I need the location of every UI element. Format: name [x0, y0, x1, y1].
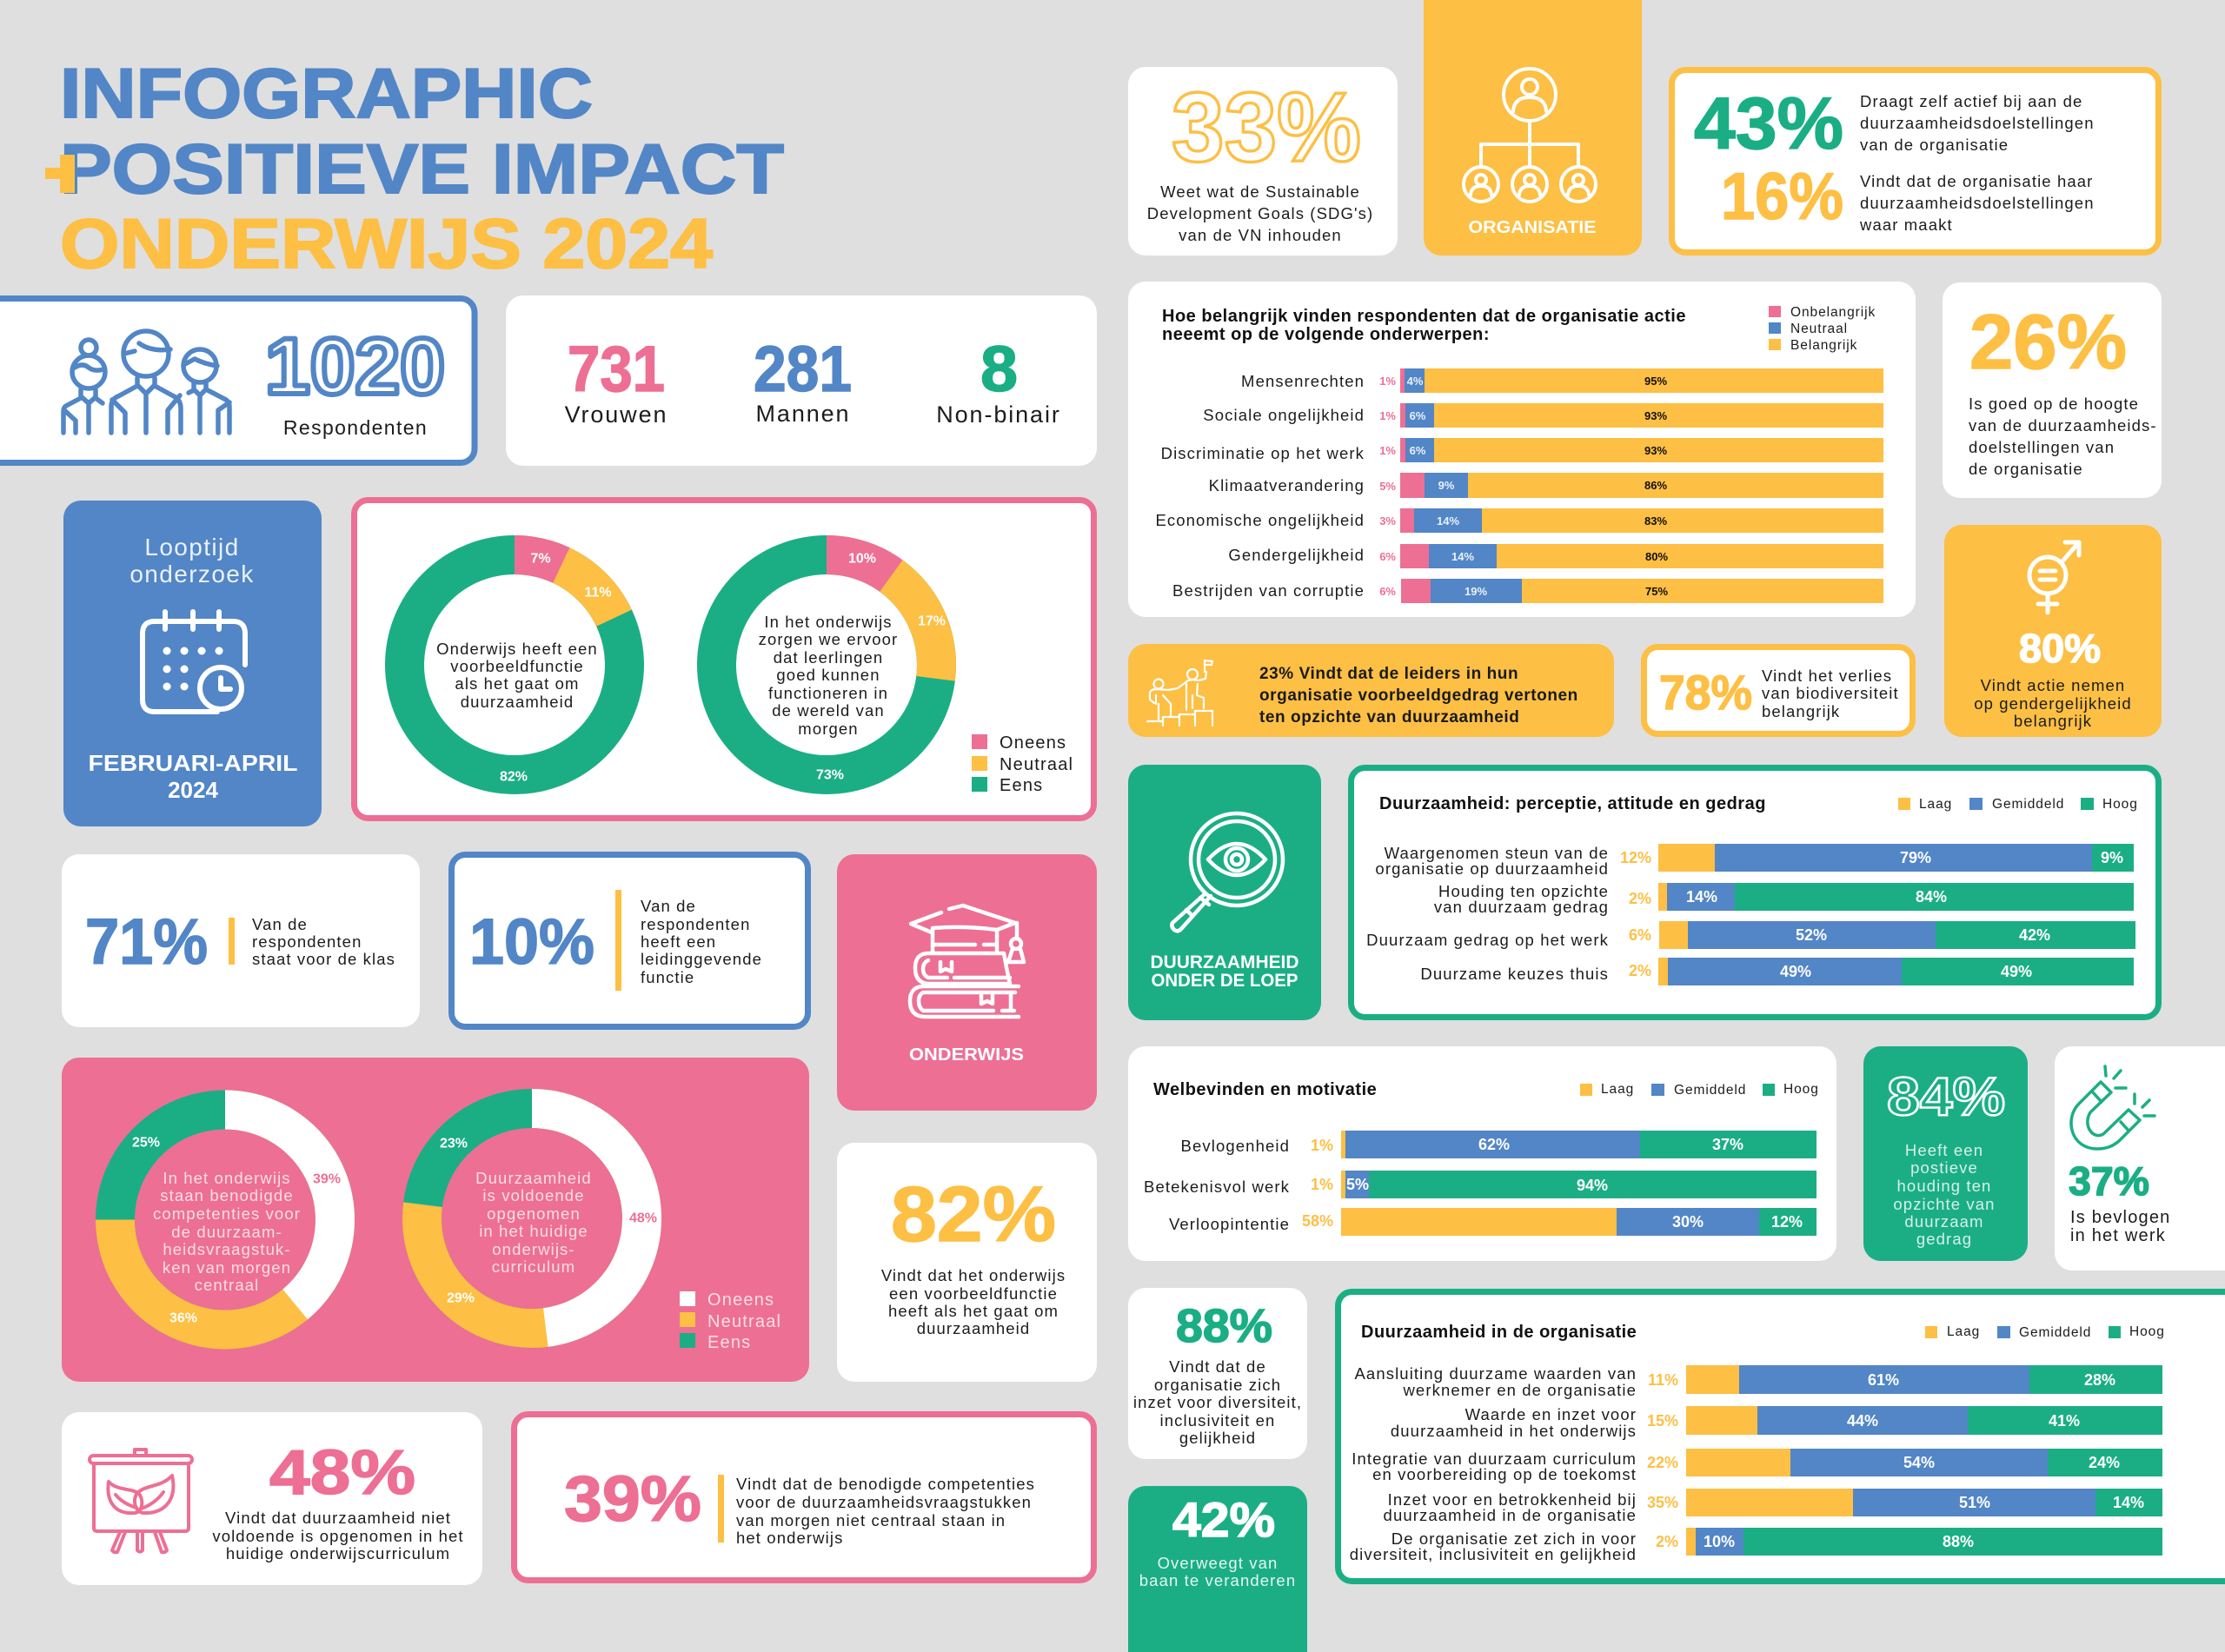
panel: chart duurzaamheid in de organisatie: [1338, 1291, 2225, 1582]
panel: 84%: 84%: [1887, 1067, 2005, 1127]
bars: 1%: [1379, 443, 1396, 457]
title: INFOGRAPHIC: [60, 55, 593, 133]
panel: 82%: duurzaamheid: [917, 1319, 1030, 1337]
legend: Gemiddeld: [1992, 796, 2064, 812]
panel: 37%: [2055, 1046, 2225, 1271]
chart: donut competenties: staan benodigde: [160, 1185, 294, 1204]
chart: donut competenties: 25%: [132, 1135, 160, 1151]
panel: 43% en 16%: duurzaamheidsdoelstellingen: [1860, 113, 2095, 132]
bars: 2%: [1629, 962, 1651, 979]
chart: donut curriculum: opgenomen: [487, 1204, 581, 1222]
panel: 84%: [1863, 1046, 2028, 1261]
legend: Gemiddeld: [1674, 1083, 1746, 1097]
bars: 14%: [2113, 1494, 2144, 1511]
bars: 2%: [1629, 890, 1651, 907]
bars: 12%: [1771, 1213, 1803, 1231]
bars: 1%: [1311, 1137, 1333, 1154]
panel: 84%: houding ten: [1897, 1177, 1991, 1194]
chart: donut leerlingen: 17%: [918, 614, 946, 629]
bars: 86%: [1644, 478, 1667, 492]
legend: Belangrijk: [1790, 337, 1857, 353]
bars: 1%: [1311, 1176, 1333, 1193]
panel: 80% gender: Vindt actie nemen: [1981, 676, 2125, 693]
bars: Bestrijden van corruptie: [1172, 581, 1365, 600]
chart: donut voorbeeldfunctie: als het gaat om: [455, 674, 580, 692]
panel: organisatie: [1424, 0, 1642, 255]
text: periode: 2024: [168, 777, 218, 803]
bars: Duurzaam gedrag op het werk: [1366, 930, 1609, 949]
bars: 14%: [1451, 549, 1474, 563]
panel: 43% en 16%: [1672, 70, 2159, 252]
panel: 82%: een voorbeeldfunctie: [889, 1284, 1058, 1302]
panel: donuts voorbeeldfunctie: [355, 501, 1093, 819]
bars: 80%: [1645, 549, 1668, 563]
chart: donut voorbeeldfunctie: Onderwijs heeft een: [436, 640, 598, 657]
panel: duurzaamheid onder de loep: ONDER DE LOEP: [1151, 970, 1298, 991]
bars: en voorbereiding op de toekomst: [1372, 1465, 1637, 1483]
chart: donut leerlingen: dat leerlingen: [774, 648, 883, 666]
panel: chart perceptie attitude gedrag: [1351, 768, 2159, 1017]
bars: 94%: [1577, 1177, 1608, 1194]
bars: 5%: [1379, 480, 1396, 492]
panel: 71% voor de klas: [62, 854, 420, 1027]
title: [45, 55, 784, 283]
icon: org chart: [1464, 69, 1596, 202]
panel: onderwijs: ONDERWIJS: [909, 1045, 1024, 1065]
bars: 9%: [2101, 849, 2123, 866]
bars: 1%: [1379, 374, 1396, 388]
stat: vrouwen: Vrouwen: [565, 401, 668, 428]
bars: Waargenomen steun van de: [1385, 843, 1609, 862]
chart: donut curriculum: 48%: [629, 1211, 657, 1225]
panel: 82%: [837, 1143, 1097, 1382]
panel: duurzaamheid onder de loep: DUURZAAMHEID: [1151, 952, 1298, 972]
bars: 51%: [1959, 1494, 1990, 1511]
panel: chart belangrijkheid onderwerpen: [1128, 282, 1916, 617]
icon: books and cap: [910, 906, 1024, 1017]
panel: 43% en 16%: van de organisatie: [1860, 136, 2009, 153]
stat: non-binair: [936, 333, 1061, 428]
bars: 44%: [1847, 1412, 1878, 1430]
bars: 93%: [1644, 408, 1667, 422]
panel: onderwijs: [837, 854, 1097, 1111]
panel: 10% leidinggevend: [452, 855, 808, 1027]
bars: 37%: [1712, 1136, 1743, 1153]
bars: [1155, 368, 1883, 603]
bars: werknemer en de organisatie: [1402, 1380, 1637, 1399]
panel: 84%: postieve: [1910, 1158, 1978, 1177]
legend: Hoog: [1783, 1081, 1819, 1097]
bars: Houding ten opzichte: [1438, 881, 1609, 900]
bars: 5%: [1346, 1176, 1369, 1193]
text: looptijd: Looptijd: [144, 534, 240, 560]
bars: Inzet voor en betrokkenheid bij: [1388, 1489, 1637, 1509]
legend: Eens: [1000, 776, 1043, 795]
chart: donut leerlingen: 73%: [816, 768, 844, 782]
icon: gender symbol: [2029, 542, 2079, 613]
panel: 71% voor de klas: respondenten: [252, 932, 362, 951]
panel: 84%: gedrag: [1916, 1229, 1972, 1248]
bars: 41%: [2049, 1412, 2080, 1430]
panel: 10% leidinggevend: 10%: [469, 906, 594, 978]
panel: 78%: 78%: [1659, 665, 1752, 720]
panel: 84%: opzichte van: [1893, 1194, 1996, 1213]
panel: 71% voor de klas: staat voor de klas: [252, 949, 395, 968]
icon: calendar: [143, 612, 245, 712]
bars: 6%: [1629, 926, 1651, 944]
panel: 39%: van morgen niet centraal staan in: [736, 1510, 1006, 1529]
panel: 43% en 16%: duurzaamheidsdoelstellingen: [1860, 193, 2095, 212]
panel: 88%: inclusiviteit en: [1160, 1411, 1275, 1429]
stat: vrouwen: 731: [568, 333, 665, 405]
bars: Bevlogenheid: [1181, 1137, 1290, 1154]
heading: Hoe belangrijk vinden respondenten dat de organisatie actie: [1162, 307, 1686, 326]
panel: 48%: Vindt dat duurzaamheid niet: [225, 1509, 451, 1526]
panel: 80% gender: [1944, 525, 2162, 737]
legend: Hoog: [2102, 796, 2138, 812]
panel: 26%: de organisatie: [1969, 459, 2083, 478]
chart: donut competenties: heidsvraagstuk-: [163, 1239, 291, 1258]
panel: 78%: [1644, 647, 1912, 733]
panel: 78%: van biodiversiteit: [1762, 683, 1899, 702]
panel: 80% gender: belangrijk: [2014, 711, 2092, 730]
bars: 35%: [1647, 1494, 1678, 1511]
panel: 33% SDG: Weet wat de Sustainable: [1160, 182, 1360, 200]
panel: 78%: belangrijk: [1762, 702, 1840, 720]
bars: 6%: [1410, 443, 1426, 457]
heading: Duurzaamheid in de organisatie: [1361, 1323, 1637, 1342]
panel: 37%: Is bevlogen: [2070, 1208, 2171, 1227]
bars: 11%: [1648, 1371, 1678, 1389]
chart: donut curriculum: in het huidige: [479, 1222, 588, 1239]
panel: 10% leidinggevend: Van de: [641, 897, 696, 914]
bars: De organisatie zet zich in voor: [1391, 1529, 1637, 1547]
bars: 49%: [1780, 963, 1811, 980]
panel: 48%: huidige onderwijscurriculum: [226, 1543, 450, 1562]
bars: Waarde en inzet voor: [1465, 1404, 1637, 1423]
bars: Klimaatverandering: [1209, 476, 1365, 494]
bars: 54%: [1903, 1454, 1935, 1471]
panel: 26%: 26%: [1969, 298, 2127, 385]
bars: Betekenisvol werk: [1144, 1177, 1290, 1196]
bars: 52%: [1796, 926, 1827, 944]
bars: organisatie op duurzaamheid: [1375, 859, 1609, 878]
panel: 23% leiders: 23% Vindt dat de leiders in hun: [1259, 664, 1518, 683]
bars: 83%: [1644, 514, 1667, 527]
chart: donut leerlingen: functioneren in: [768, 683, 888, 702]
bars: duurzaamheid in de organisatie: [1384, 1505, 1637, 1524]
legend: Hoog: [2129, 1324, 2165, 1338]
panel: 26%: Is goed op de hoogte: [1969, 395, 2139, 412]
panel: 88%: gelijkheid: [1179, 1429, 1256, 1446]
panel: 33% SDG: Development Goals (SDG's): [1147, 203, 1373, 222]
bars: Discriminatie op het werk: [1161, 443, 1365, 462]
bars: Duurzame keuzes thuis: [1420, 965, 1609, 982]
bars: 3%: [1379, 514, 1396, 527]
panel: 10% leidinggevend: heeft een: [641, 932, 716, 951]
bars: 61%: [1868, 1371, 1899, 1389]
chart: donut competenties: 39%: [313, 1171, 341, 1187]
panel: 37%: in het werk: [2070, 1226, 2166, 1245]
panel: 80% gender: op gendergelijkheid: [1974, 693, 2132, 713]
bars: 2%: [1656, 1533, 1678, 1550]
chart: donut competenties: 36%: [169, 1310, 197, 1326]
chart: donut voorbeeldfunctie: 82%: [500, 770, 528, 784]
bars: 19%: [1465, 584, 1487, 598]
bars: 79%: [1900, 849, 1931, 866]
chart: donut voorbeeldfunctie: [405, 551, 624, 784]
panel: 33% SDG: van de VN inhouden: [1179, 226, 1342, 243]
bars: [1350, 1364, 2162, 1562]
panel: geslacht: [506, 295, 1097, 466]
chart: donut competenties: ken van morgen: [163, 1258, 291, 1276]
panel: 26%: [1943, 282, 2162, 498]
bars: [1144, 1131, 1817, 1236]
bars: 10%: [1704, 1533, 1735, 1550]
panel: 39%: 39%: [564, 1463, 701, 1535]
title: ONDERWIJS 2024: [60, 205, 713, 283]
legend: Laag: [1919, 796, 1952, 812]
bars: 14%: [1686, 888, 1717, 906]
bars: 24%: [2089, 1454, 2120, 1471]
label: respondenten: Respondenten: [283, 416, 428, 439]
chart: donut competenties: competenties voor: [153, 1204, 301, 1222]
chart: donut curriculum: is voldoende: [482, 1185, 585, 1204]
bars: Verloopintentie: [1169, 1215, 1290, 1232]
bars: Gendergelijkheid: [1228, 546, 1365, 563]
panel: 26%: doelstellingen van: [1969, 438, 2115, 455]
panel: 88%: inzet voor diversiteit,: [1133, 1392, 1302, 1411]
chart: donut leerlingen: morgen: [798, 720, 859, 737]
bars: 95%: [1644, 374, 1667, 388]
chart: donut curriculum: onderwijs-: [492, 1239, 575, 1258]
chart: donut leerlingen: [716, 551, 946, 782]
bars: 28%: [2084, 1371, 2115, 1389]
panel: 88%: 88%: [1176, 1300, 1272, 1352]
panel: 39%: [515, 1415, 1093, 1580]
heading: Duurzaamheid: perceptie, attitude en gedrag: [1379, 794, 1766, 813]
legend: [972, 733, 1073, 795]
bars: 6%: [1410, 408, 1426, 422]
chart: donut voorbeeldfunctie: voorbeeldfunctie: [450, 657, 584, 674]
chart: donut competenties: de duurzaam-: [171, 1222, 282, 1241]
panel: 10% leidinggevend: functie: [641, 968, 694, 985]
bars: duurzaamheid in het onderwijs: [1391, 1422, 1637, 1439]
bars: 30%: [1672, 1213, 1704, 1231]
panel: 82%: heeft als het gaat om: [888, 1302, 1059, 1319]
bars: 6%: [1379, 584, 1396, 598]
legend: Neutraal: [1790, 322, 1848, 335]
bars: Mensenrechten: [1241, 372, 1365, 389]
panel: 43% en 16%: 43%: [1694, 83, 1843, 164]
bars: 14%: [1437, 514, 1459, 527]
chart: donut leerlingen: 10%: [848, 551, 876, 567]
panel: 43% en 16%: Draagt zelf actief bij aan de: [1860, 92, 2082, 109]
bars: Integratie van duurzaam curriculum: [1352, 1450, 1637, 1467]
bars: 1%: [1379, 408, 1396, 422]
stat: mannen: 281: [754, 333, 852, 405]
bars: 88%: [1943, 1533, 1974, 1550]
panel: 43% en 16%: 16%: [1721, 160, 1843, 234]
heading: Welbevinden en motivatie: [1153, 1080, 1377, 1099]
bars: van duurzaam gedrag: [1434, 897, 1609, 916]
panel: 71% voor de klas: Van de: [252, 914, 308, 933]
panel: 42%: baan te veranderen: [1139, 1571, 1296, 1589]
panel: 82%: 82%: [891, 1171, 1056, 1258]
panel: 84%: duurzaam: [1904, 1211, 1984, 1231]
legend: Oneens: [1000, 733, 1066, 753]
legend: [680, 1290, 781, 1352]
panel: 42%: 42%: [1172, 1492, 1275, 1547]
chart: donut curriculum: Duurzaamheid: [475, 1168, 592, 1187]
bars: 49%: [2001, 963, 2032, 980]
chart: donut curriculum: curriculum: [492, 1257, 575, 1276]
panel: 23% leiders: ten opzichte van duurzaamheid: [1259, 707, 1519, 726]
chart: donut voorbeeldfunctie: duurzaamheid: [461, 692, 574, 711]
panel: 23% leiders: organisatie voorbeeldgedrag vertonen: [1259, 687, 1578, 704]
stat: non-binair: 8: [980, 333, 1018, 405]
icon: people: [63, 331, 229, 433]
bars: 58%: [1302, 1212, 1333, 1230]
legend: Neutraal: [1000, 755, 1073, 774]
chart: donut curriculum: 29%: [447, 1291, 475, 1305]
panel: duurzaamheid onder de loep: [1128, 765, 1321, 1020]
panel: 71% voor de klas: 71%: [85, 906, 208, 978]
legend: [1925, 1324, 2165, 1340]
title: POSITIEVE IMPACT: [60, 130, 784, 209]
bars: 75%: [1645, 584, 1668, 598]
panel: 88%: [1128, 1288, 1307, 1459]
panel: 39%: voor de duurzaamheidsvraagstukken: [736, 1493, 1032, 1510]
chart: donut voorbeeldfunctie: 7%: [530, 551, 551, 567]
bars: 22%: [1647, 1454, 1678, 1471]
text: periode: FEBRUARI-APRIL: [89, 750, 298, 776]
legend: Gemiddeld: [2019, 1324, 2091, 1340]
panel: 78%: Vindt het verlies: [1762, 666, 1892, 685]
panel: organisatie: ORGANISATIE: [1469, 218, 1596, 237]
panel: 26%: van de duurzaamheids-: [1969, 415, 2157, 435]
panel: looptijd onderzoek: [63, 501, 322, 826]
panel: respondenten: [0, 299, 475, 462]
legend: [1898, 796, 2138, 812]
panel: 48%: voldoende is opgenomen in het: [212, 1526, 464, 1545]
icon: leaders on stairs: [1147, 660, 1212, 726]
panel: 39%: het onderwijs: [736, 1528, 843, 1547]
panel: 48%: 48%: [269, 1438, 415, 1508]
bars: 93%: [1644, 443, 1667, 457]
icon: presentation board: [90, 1450, 192, 1552]
bars: diversiteit, inclusiviteit en gelijkheid: [1350, 1545, 1637, 1562]
panel: 10% leidinggevend: leidinggevende: [641, 949, 762, 968]
stat: mannen: Mannen: [756, 401, 850, 427]
chart: donut competenties: [115, 1110, 341, 1330]
bars: 42%: [2019, 926, 2050, 944]
panel: donuts onderwijs: [62, 1058, 809, 1382]
chart: donut leerlingen: de wereld van: [772, 700, 885, 720]
icon: magnifier with eye: [1172, 813, 1283, 931]
panel: 23% leiders: [1128, 644, 1614, 737]
bars: 12%: [1620, 849, 1651, 866]
chart: donut competenties: In het onderwijs: [163, 1168, 291, 1187]
bars: Economische ongelijkheid: [1155, 511, 1365, 528]
panel: 43% en 16%: Vindt dat de organisatie haar: [1860, 172, 2093, 189]
panel: 82%: Vindt dat het onderwijs: [881, 1265, 1066, 1284]
bars: Sociale ongelijkheid: [1203, 405, 1365, 424]
icon: magnet: [2071, 1066, 2155, 1149]
panel: 80% gender: 80%: [2019, 626, 2101, 671]
panel: chart welbevinden en motivatie: [1128, 1046, 1836, 1261]
text: looptijd: onderzoek: [130, 560, 255, 587]
legend: Oneens: [707, 1290, 774, 1310]
panel: 39%: Vindt dat de benodigde competenties: [736, 1474, 1035, 1493]
heading: neeemt op de volgende onderwerpen:: [1162, 325, 1490, 344]
panel: 43% en 16%: waar maakt: [1859, 216, 1953, 233]
chart: donut leerlingen: goed kunnen: [776, 666, 880, 683]
legend: Laag: [1947, 1324, 1980, 1338]
legend: Eens: [707, 1333, 751, 1352]
stat: non-binair: Non-binair: [936, 401, 1061, 428]
panel: 42%: [1128, 1486, 1307, 1652]
legend: Neutraal: [707, 1312, 781, 1331]
chart: donut leerlingen: zorgen we ervoor: [759, 629, 898, 648]
panel: 84%: Heeft een: [1905, 1140, 1983, 1159]
chart: donut leerlingen: In het onderwijs: [764, 612, 893, 631]
panel: 33% SDG: 33%: [1172, 72, 1361, 182]
chart: donut voorbeeldfunctie: 11%: [584, 586, 612, 600]
chart: donut competenties: centraal: [195, 1276, 259, 1293]
legend: [1769, 304, 1876, 353]
bars: 9%: [1438, 478, 1455, 492]
number: 1020: 1020: [265, 322, 445, 411]
panel: 88%: Vindt dat de: [1169, 1357, 1266, 1375]
chart: donut curriculum: [422, 1109, 657, 1328]
bars: 6%: [1379, 549, 1396, 563]
bars: 84%: [1916, 888, 1947, 906]
panel: 48%: [62, 1412, 482, 1585]
legend: [1580, 1081, 1819, 1097]
bars: 62%: [1478, 1136, 1510, 1153]
legend: Onbelangrijk: [1790, 304, 1876, 320]
bars: [1366, 843, 2135, 985]
legend: Laag: [1601, 1081, 1634, 1097]
bars: 15%: [1647, 1412, 1678, 1430]
panel: 42%: Overweegt van: [1158, 1554, 1278, 1571]
bars: Aansluiting duurzame waarden van: [1354, 1364, 1637, 1382]
panel: 88%: organisatie zich: [1154, 1375, 1281, 1394]
panel: 10% leidinggevend: respondenten: [641, 914, 750, 933]
bars: 4%: [1407, 374, 1424, 388]
chart: donut curriculum: 23%: [440, 1137, 468, 1151]
panel: 37%: 37%: [2069, 1158, 2149, 1204]
panel: 33% SDG: [1128, 67, 1398, 255]
